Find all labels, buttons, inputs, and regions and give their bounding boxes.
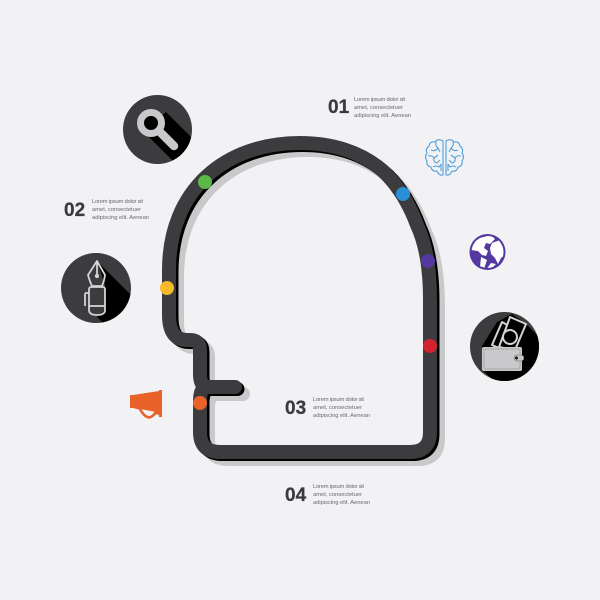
step 02 text: amet, consectetuer <box>92 207 141 213</box>
step 03 text: adipiscing elit. Aenean <box>313 413 370 419</box>
head outline timeline <box>169 143 438 459</box>
step 03 text: Lorem ipsum dolor sit <box>313 397 364 403</box>
step 03 text <box>285 397 370 419</box>
step 02 text: 02 <box>64 200 85 221</box>
step 04 text <box>285 484 370 506</box>
step 02 text <box>64 199 149 221</box>
step 03 text: amet, consectetuer <box>313 405 362 411</box>
icon: globe <box>470 234 506 270</box>
step 01 text: 01 <box>328 97 350 118</box>
step 02 text: Lorem ipsum dolor sit <box>92 199 143 205</box>
step 01 text: adipiscing elit. Aenean <box>354 113 411 119</box>
icon: magnifier <box>123 95 192 164</box>
step 04 text: amet, consectetuer <box>313 492 362 498</box>
step 04 text: adipiscing elit. Aenean <box>313 500 370 506</box>
step 04 text: Lorem ipsum dolor sit <box>313 484 364 490</box>
icon: wallet with money <box>470 312 539 381</box>
icon: megaphone <box>130 390 162 417</box>
step 01 text: amet, consectetuer <box>354 105 403 111</box>
step 01 text: Lorem ipsum dolor sit <box>354 97 405 103</box>
icon: brain <box>426 140 464 175</box>
icon: fountain pen <box>61 253 131 323</box>
step 02 text: adipiscing elit. Aenean <box>92 215 149 221</box>
step 03 text: 03 <box>285 398 306 419</box>
step 01 text <box>328 97 411 119</box>
step 04 text: 04 <box>285 485 307 506</box>
marker dots <box>160 175 437 410</box>
